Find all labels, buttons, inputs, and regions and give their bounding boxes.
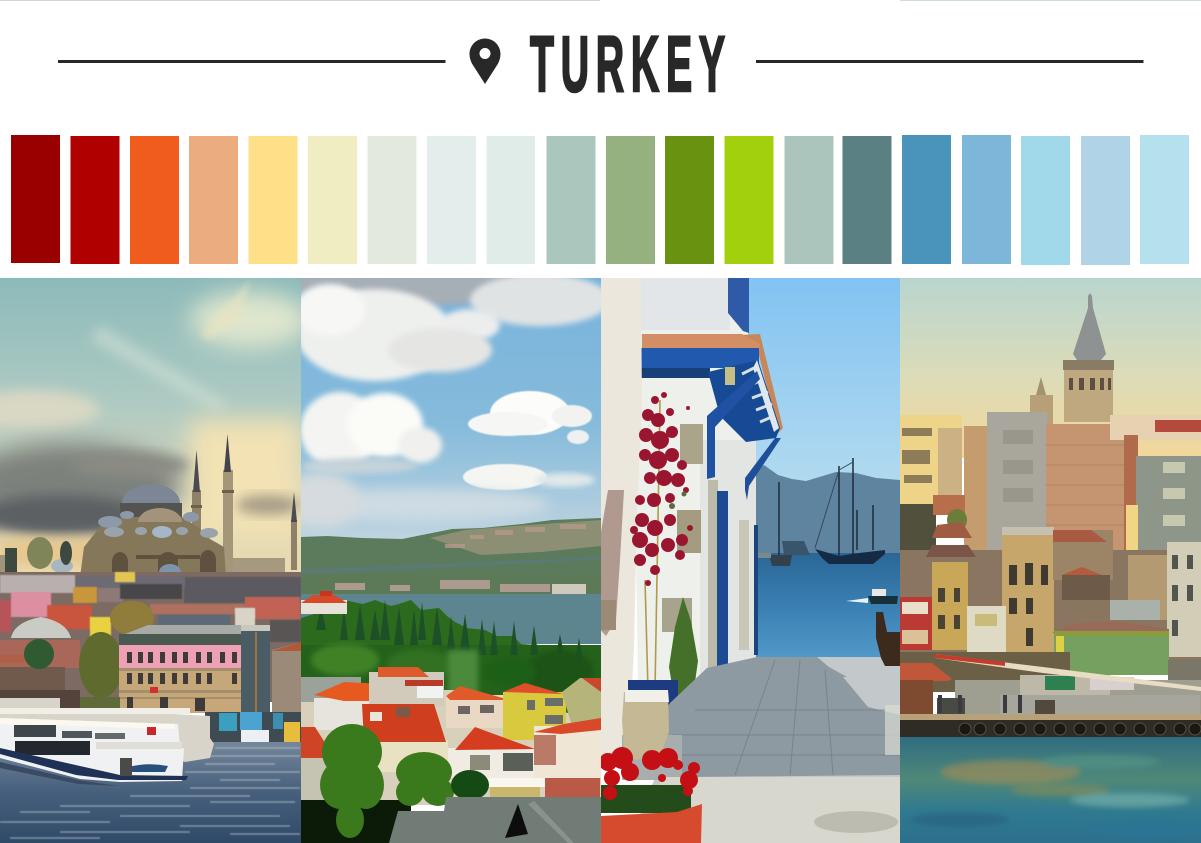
- pink building: [119, 625, 301, 714]
- Galata tower: [1030, 293, 1114, 425]
- ferry: [0, 687, 214, 786]
- far hills: [301, 518, 601, 574]
- yellow tower: [1002, 527, 1054, 655]
- title: TURKEY: [530, 21, 732, 109]
- waterfront fence: [900, 654, 1201, 720]
- water: [0, 742, 301, 843]
- photo: white harbour street with blue trim: [597, 278, 900, 843]
- left pillar: [600, 278, 642, 766]
- right rule: [756, 60, 1144, 63]
- trees: [320, 724, 454, 838]
- houses: [301, 667, 601, 805]
- grey roof: [389, 797, 601, 843]
- clouds: [301, 278, 601, 531]
- icon: location pin: [470, 38, 500, 84]
- mosque: [51, 434, 297, 580]
- awning: [640, 334, 783, 500]
- city: [0, 572, 301, 702]
- quay: [900, 714, 1201, 720]
- paving: [622, 657, 900, 843]
- buildings: [900, 415, 962, 507]
- bougainvillea: [630, 392, 693, 690]
- photo: Istanbul mosque and ferry: [0, 278, 310, 843]
- sailboats: [757, 458, 885, 566]
- stone planter: [622, 692, 669, 760]
- photo: Bosphorus hillside with red roofs: [301, 278, 601, 843]
- dark foreground: [301, 800, 411, 843]
- geraniums: [599, 747, 702, 843]
- left rule: [58, 60, 446, 63]
- title block: Turkey heading with pin and rules: [58, 21, 1144, 109]
- potted plant: [628, 597, 698, 706]
- green building: [1053, 621, 1169, 675]
- white building: [636, 316, 748, 680]
- mountains: [756, 465, 900, 553]
- speedboat: [846, 589, 898, 604]
- sea chairs: [876, 612, 900, 666]
- photo: Galata tower waterfront: [900, 278, 1201, 843]
- trees on skyline: [0, 537, 72, 574]
- colour palette swatches: [11, 135, 1189, 265]
- forest: [301, 600, 568, 713]
- water: [900, 737, 1201, 843]
